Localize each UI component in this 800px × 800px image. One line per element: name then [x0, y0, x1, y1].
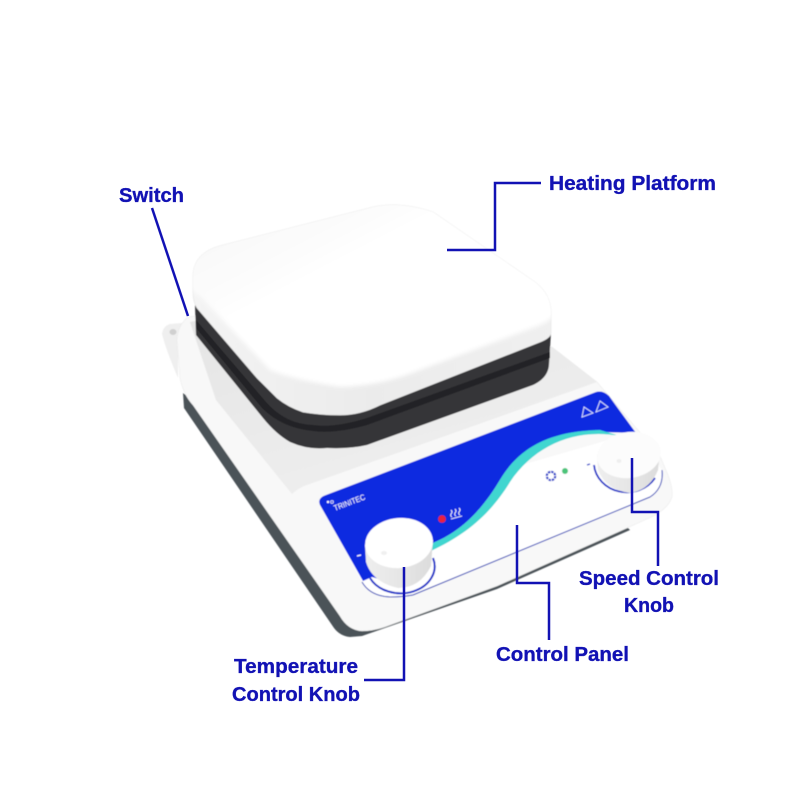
- callout: heating platform: Heating Platform: [549, 172, 716, 195]
- callout: heating platform: [447, 172, 716, 250]
- red indicator: [438, 515, 446, 523]
- heating platform lid: [192, 231, 552, 416]
- heat icon: [451, 508, 462, 519]
- blue ring indicator: [547, 472, 555, 480]
- temperature knob: [363, 515, 435, 593]
- callout: temperature control knob: Control Knob: [232, 683, 360, 706]
- control panel white front: [320, 432, 662, 597]
- main body: [177, 300, 672, 631]
- minus mark speed: [587, 464, 590, 465]
- panel border line: [362, 470, 662, 597]
- brand logo: TRINITEC: [332, 493, 367, 513]
- warning icons: [582, 401, 608, 417]
- callout: temperature control knob: [232, 567, 404, 706]
- teal swoosh: [431, 430, 620, 551]
- callout: speed control knob: Knob: [624, 594, 674, 617]
- callout: temperature control knob: Temperature: [234, 655, 358, 678]
- device illustration: [162, 194, 672, 637]
- rear switch tab: [162, 323, 182, 378]
- callout: control panel: [496, 525, 629, 666]
- blue panel: [319, 392, 636, 585]
- dark platform band: [195, 305, 551, 448]
- callout: switch: [119, 184, 188, 316]
- callout: switch: Switch: [119, 184, 184, 207]
- callout: speed control knob: Speed Control: [579, 567, 719, 590]
- speed knob: [594, 428, 664, 493]
- callout: speed control knob: [579, 458, 719, 617]
- minus mark temperature: [357, 555, 361, 556]
- diagram: hot plate stirrer with labels: [119, 174, 718, 702]
- green indicator: [562, 468, 568, 474]
- dark base underside: [183, 393, 630, 637]
- top deck surface: [190, 300, 597, 494]
- callout: control panel: Control Panel: [496, 643, 629, 666]
